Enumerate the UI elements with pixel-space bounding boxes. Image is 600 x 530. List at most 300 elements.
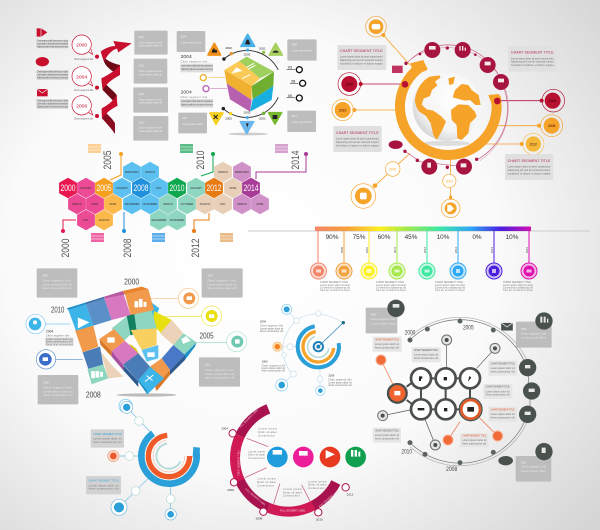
year labels [51, 276, 214, 399]
grey info boxes: Chart segment title [42, 280, 71, 283]
year bubbles [72, 35, 99, 120]
grey info boxes [133, 31, 317, 141]
arc year markers: 2012 [347, 492, 354, 496]
small text boxes [373, 337, 517, 447]
orbit around cube [222, 48, 278, 119]
grey info boxes: 2008 [43, 382, 49, 384]
small text boxes: Amet consectetur elit [491, 416, 515, 419]
hexagon labels [72, 170, 264, 222]
connectors [113, 407, 175, 514]
concentric arcs [138, 425, 200, 487]
dark icon circles [387, 300, 553, 465]
grey info boxes: Chart segment title [205, 369, 234, 372]
captions: 2006 [262, 360, 268, 364]
drop markers [310, 231, 537, 279]
small text boxes: CHART SEGMENT TITLE [491, 362, 515, 365]
percentages [326, 234, 519, 241]
left text blocks: Adipiscing elit sed do eiusmod tempor [181, 68, 213, 71]
rotated year labels: 2015 [525, 246, 529, 253]
caption: Sed do eiusmod [46, 344, 73, 346]
panel: small blue ring chart [260, 304, 352, 395]
year circles: 2010 [339, 108, 347, 112]
3D cube [224, 57, 274, 135]
year bubbles: 2004 [76, 74, 87, 80]
vertical year labels: 2012 [190, 238, 202, 258]
rotated year labels: 2013 [454, 246, 458, 253]
captions: 2008 [328, 374, 335, 378]
text captions [320, 281, 533, 292]
vertical year labels: 2005 [102, 150, 114, 170]
title boxes: Lorem ipsum dolor sit amet consectetur [511, 57, 554, 60]
title boxes: Incididunt ut labore et dolore magna [336, 144, 379, 147]
hexagon cells [59, 162, 269, 230]
rotated year labels [340, 246, 529, 253]
rotated year labels: 2009 [340, 246, 344, 253]
grey info boxes: Lorem ipsum dolor [292, 50, 313, 53]
hexagon labels: JANUARY [80, 186, 92, 190]
panel: rainbow percent timeline [248, 226, 590, 292]
title boxes: Lorem ipsum dolor sit amet consectetur [508, 166, 551, 169]
small text boxes: Lorem ipsum dolor sit [462, 439, 487, 442]
grey info boxes: Chart segment title [139, 70, 163, 73]
connector lines [43, 298, 228, 359]
caption: Lorem ipsum dolor sit [46, 338, 73, 341]
captions: Amet consectetur elit [260, 330, 284, 333]
year labels: 2000 [405, 331, 416, 337]
captions: Lorem ipsum [248, 450, 265, 453]
icons and text column: Adipiscing elit sed do eiusmod tempor [37, 76, 69, 79]
arc segment labels: FULL SEGMENT LABEL [318, 489, 340, 508]
small text boxes: Lorem ipsum dolor sit [414, 354, 438, 357]
grey info boxes: 2004 [371, 315, 377, 317]
side markers: 08 [291, 79, 295, 83]
concentric arcs [294, 323, 342, 371]
triangle year tags: 2001 [259, 47, 266, 51]
panel: hexagon timeline [59, 144, 308, 258]
connectors [381, 340, 498, 445]
left text blocks: 2004 [181, 54, 192, 60]
grey info boxes: 2006 [207, 275, 213, 277]
grey info boxes: 2006 [182, 118, 188, 120]
rotated year labels: 2010 [365, 246, 369, 253]
arc year markers: 2008 [256, 517, 263, 521]
rotated year labels: 2014 [490, 246, 494, 253]
blocks [67, 287, 197, 394]
grey info boxes: Lorem ipsum dolor sit [139, 130, 162, 133]
grey info boxes: 2008 [139, 94, 145, 96]
hexagon labels: APRIL [109, 202, 117, 206]
year bubbles: Chart segment title [74, 117, 94, 120]
crimson arc segments [216, 386, 360, 530]
year bubbles: Chart segment title [74, 89, 94, 92]
small text boxes: Amet consectetur elit [375, 346, 399, 349]
text captions: Sed do eiusmod tempor [320, 289, 350, 292]
markers [108, 401, 176, 520]
hexagon labels: MAY [220, 202, 226, 206]
ring nodes [388, 368, 482, 421]
captions: Consectetur [283, 495, 300, 498]
grey info boxes: Amet consectetur elit [207, 287, 237, 290]
maroon icon circles [389, 42, 509, 175]
captions: Dolor sit amet [257, 481, 276, 484]
year circles: 2008 [346, 82, 353, 86]
small text boxes: Amet consectetur elit [375, 437, 399, 440]
hexagon year labels [60, 183, 258, 193]
grey info boxes: Lorem ipsum dolor [521, 470, 546, 473]
captions [260, 320, 352, 387]
grey info boxes: Lorem ipsum dolor [182, 123, 203, 126]
left text blocks: Lorem ipsum dolor sit amet consectetur [181, 65, 213, 68]
grey info boxes [37, 268, 243, 404]
caption [45, 330, 73, 346]
title boxes: Adipiscing elit sed do eiusmod tempor [336, 141, 379, 144]
captions: Amet consectetur elit [262, 370, 285, 373]
small text boxes: Lorem ipsum dolor sit [491, 413, 515, 416]
hexagon labels: OCTOBER [181, 202, 194, 206]
grey info boxes: 2004 [42, 275, 48, 277]
grey info boxes: Lorem ipsum dolor sit [139, 102, 162, 105]
grey info boxes: Lorem ipsum dolor sit [43, 391, 73, 394]
year bubbles: Chart segment title [74, 58, 94, 61]
percentages: 10% [437, 234, 450, 241]
title boxes: CHART SEGMENT TITLE [340, 49, 384, 53]
grey info boxes: Lorem ipsum dolor sit [205, 373, 235, 376]
vertical year labels: 2008 [122, 238, 134, 258]
grey info boxes: Lorem ipsum dolor sit [207, 284, 237, 287]
small text boxes: CHART SEGMENT TITLE [414, 349, 438, 352]
text captions: CHART SEGMENT TITLE [320, 281, 348, 284]
caption: Amet consectetur elit [46, 341, 73, 344]
left text blocks: Lorem ipsum dolor sit amet consectetur [181, 100, 213, 103]
captions: Dolor sit amet [258, 431, 277, 434]
text captions: Consectetur adipiscing elit [503, 286, 533, 290]
hexagon labels: MARCH [218, 170, 228, 174]
title boxes: Amet consectetur elit [93, 441, 122, 444]
title boxes: CHART SEGMENT TITLE [336, 131, 380, 135]
captions: Dolor sit amet [283, 491, 302, 494]
left text blocks: Chart segment title [181, 61, 208, 64]
panel: 3D block loop [26, 268, 247, 413]
satellite markers [376, 335, 503, 450]
year bubbles: 2000 [76, 43, 87, 49]
arc segment labels: FULL SEGMENT LABEL [236, 451, 239, 477]
year circles: 2008 [548, 124, 555, 128]
icons and text column: Lorem ipsum dolor sit amet consectetur [37, 43, 69, 46]
small text boxes: Lorem ipsum dolor sit [491, 367, 515, 370]
markers [273, 304, 345, 395]
grey info boxes: Lorem ipsum dolor sit [139, 45, 162, 48]
grey info boxes: Chart segment title [521, 332, 547, 335]
hexagon year labels: 2010 [170, 183, 184, 193]
small mini tables [88, 144, 288, 242]
hexagon year labels: 2008 [134, 183, 148, 193]
icons and text column: Lorem ipsum dolor sit amet consectetur [37, 102, 69, 105]
text captions: Consectetur adipiscing elit [320, 286, 350, 290]
connector lines [353, 35, 542, 200]
grey info boxes: 2012 [521, 462, 527, 464]
small text boxes: Lorem ipsum dolor sit [375, 343, 399, 346]
captions: Lorem ipsum dolor sit [260, 327, 284, 330]
vertical year labels: 2010 [195, 150, 207, 170]
captions: Lorem ipsum dolor sit [328, 381, 352, 384]
grey info boxes: Chart segment title [139, 98, 163, 101]
text captions: Lorem ipsum dolor sit amet [320, 284, 350, 287]
title boxes: Adipiscing elit sed do eiusmod tempor [340, 59, 383, 62]
text captions: Sed do eiusmod tempor [376, 289, 406, 292]
hexagon year labels: 2005 [96, 183, 112, 193]
grey info boxes: 2004 [139, 37, 145, 39]
caption: 2004 [46, 330, 54, 334]
hexagon labels: DECEMBER [125, 202, 139, 206]
grey info boxes: Amet consectetur elit [42, 287, 72, 290]
captions: Chart segment title [262, 364, 286, 367]
text captions: CHART SEGMENT TITLE [503, 281, 531, 284]
text captions: Sed do eiusmod tempor [435, 289, 465, 292]
captions: Lorem ipsum [257, 478, 276, 481]
hexagon labels: DECEMBER [152, 218, 166, 222]
captions: 2004 [260, 320, 266, 324]
red ribbon arrow [101, 41, 132, 134]
hexagon year labels: 2014 [244, 183, 258, 193]
left text blocks [181, 54, 213, 108]
arc segment labels: FULL SEGMENT LABEL [245, 488, 267, 507]
grey info boxes: Chart segment title [521, 466, 547, 469]
captions: Chart segment title [260, 325, 284, 328]
title boxes [86, 429, 124, 494]
icons and text column: Chart segment title lorem ipsum dolor [37, 99, 69, 102]
captions: Amet consectetur elit [328, 384, 352, 387]
title boxes: Incididunt ut labore et dolore magna [508, 172, 551, 175]
arc year markers: 2010 [316, 517, 323, 521]
grey info boxes: Lorem ipsum dolor sit [42, 284, 72, 287]
triangle year tags: 2001 [259, 116, 266, 120]
title boxes: CHART SEGMENT TITLE [508, 159, 551, 163]
triangle year tags: 2003 [244, 52, 251, 56]
hexagon labels: AUGUST [99, 218, 110, 222]
panel: blue and red ring chart [86, 401, 200, 520]
title boxes: Incididunt ut labore et dolore magna [340, 62, 383, 65]
year labels: 2000 [124, 276, 139, 286]
arc segment labels: FULL SEGMENT LABEL [239, 408, 260, 429]
icons and text column: Chart segment title lorem ipsum dolor [37, 70, 69, 73]
percentages: 75% [353, 234, 366, 241]
title boxes: Amet consectetur elit [89, 488, 119, 491]
icons and text column: Lorem ipsum dolor sit amet consectetur [37, 73, 69, 76]
small text boxes: Lorem ipsum dolor sit [375, 434, 399, 437]
left text blocks: 2004 [181, 89, 192, 95]
small text boxes: CHART SEGMENT TITLE [462, 435, 487, 438]
hexagon labels: NOVEMBER [170, 218, 185, 222]
vertical year labels: 2000 [60, 238, 72, 258]
panel: globe chart [332, 16, 565, 218]
text captions: Consectetur adipiscing elit [376, 286, 406, 290]
year labels: 2008 [446, 467, 458, 473]
year circles: 2012 [446, 179, 453, 183]
title boxes: Adipiscing elit sed do eiusmod tempor [511, 61, 554, 64]
small text boxes: Lorem ipsum dolor sit [486, 390, 510, 393]
hexagon labels: MARCH [72, 202, 82, 206]
captions: Dolor sit amet [308, 484, 327, 487]
orbit dots [407, 318, 496, 465]
title boxes: CHART SEGMENT TITLE [93, 433, 122, 436]
side markers [200, 65, 306, 101]
captions: Chart segment title [328, 379, 352, 382]
hexagon labels: FEBRUARY [235, 170, 249, 174]
icons and text column [36, 28, 69, 109]
year labels [401, 326, 474, 473]
grey info boxes: Lorem ipsum dolor [521, 337, 546, 340]
small text boxes: Amet consectetur elit [462, 442, 487, 445]
hexagon labels: NOVEMBER [143, 202, 158, 206]
captions: Consectetur [308, 487, 325, 490]
title boxes: Lorem ipsum dolor sit [93, 438, 122, 441]
arc segment labels [236, 408, 340, 513]
small text boxes: Amet consectetur elit [491, 370, 515, 373]
triangle year tags [208, 34, 282, 134]
title boxes: CHART SEGMENT TITLE [511, 51, 555, 55]
percentages: 10% [506, 234, 519, 241]
grey info boxes: Lorem ipsum dolor [371, 322, 396, 325]
title boxes: CHART SEGMENT TITLE [89, 480, 119, 483]
captions: Lorem ipsum [283, 488, 302, 491]
grey info boxes: Chart segment title [43, 387, 72, 390]
year circles: 2012 [530, 142, 537, 146]
vertical year labels [60, 150, 302, 258]
year labels: 2010 [401, 450, 413, 456]
captions: Consectetur [257, 484, 274, 487]
connector lines [61, 152, 308, 233]
grey info boxes: 2004 [181, 36, 187, 38]
grey info boxes: Lorem ipsum dolor [292, 121, 313, 124]
grey info boxes [366, 308, 552, 482]
rainbow bar [315, 226, 531, 231]
grey info boxes: Chart segment title [139, 41, 163, 44]
grey info boxes: Amet consectetur elit [205, 376, 235, 379]
triangle year tags: 2002 [225, 46, 232, 50]
thin orbit [277, 309, 343, 391]
arc year markers: 2006 [227, 488, 234, 492]
year circles: 2010 [389, 167, 397, 171]
hexagon labels: FEBRUARY [125, 170, 139, 174]
hexagon year labels: 2000 [60, 183, 76, 193]
grey info boxes: 2012 [139, 122, 145, 124]
year labels: 2008 [86, 389, 101, 399]
year labels: 2005 [463, 326, 474, 332]
text captions: CHART SEGMENT TITLE [376, 281, 404, 284]
title boxes [333, 45, 557, 180]
panel: network of circles [366, 300, 553, 482]
small text boxes: Amet consectetur elit [414, 357, 438, 360]
grey info boxes: 2012 [205, 365, 211, 367]
arc segment labels: FULL SEGMENT LABEL [280, 510, 306, 513]
percentages: 45% [405, 234, 418, 241]
text captions: Sed do eiusmod tempor [503, 289, 533, 292]
rotated year labels: 2011 [393, 247, 397, 253]
small text boxes: CHART SEGMENT TITLE [375, 338, 399, 341]
text captions: CHART SEGMENT TITLE [435, 281, 463, 284]
title boxes: Incididunt ut labore et dolore magna [511, 64, 554, 67]
captions [248, 428, 327, 498]
outer double orbit [410, 317, 531, 466]
hexagon labels: MAY [83, 218, 89, 222]
title boxes: Adipiscing elit sed do eiusmod tempor [508, 169, 551, 172]
triangle year tags: 2003 [244, 110, 251, 114]
captions: Lorem ipsum [308, 480, 327, 483]
icons and text column: Chart segment title lorem ipsum dolor [37, 40, 69, 43]
captions: Consectetur [258, 434, 275, 437]
globe [413, 73, 481, 146]
side markers: 03 [288, 65, 292, 69]
shadow [117, 393, 177, 397]
grey info boxes: 2012 [292, 116, 298, 118]
grey info boxes: Lorem ipsum dolor sit [139, 73, 162, 76]
triangle year tags: 2002 [225, 117, 232, 121]
circular icons [26, 288, 247, 413]
year bubbles: 2008 [76, 103, 87, 109]
hexagon labels: JANUARY [116, 186, 128, 190]
icons and text column: Adipiscing elit sed do eiusmod tempor [37, 105, 69, 108]
grey info boxes: 2006 [139, 66, 145, 68]
baseline [248, 230, 590, 232]
grey info boxes: Chart segment title [139, 127, 163, 130]
hexagon labels: MARCH [163, 202, 173, 206]
hexagon labels: APRIL [91, 202, 99, 206]
left text blocks: Adipiscing elit sed do eiusmod tempor [181, 103, 213, 106]
title boxes: Lorem ipsum dolor sit amet consectetur [336, 138, 379, 141]
side markers: 09 [288, 94, 292, 98]
year circles: 2004 [549, 99, 556, 103]
percentages: 90% [326, 234, 339, 241]
hexagon year labels: 2012 [206, 183, 222, 193]
text captions: Consectetur adipiscing elit [435, 286, 465, 290]
colored icon circles [267, 447, 366, 467]
icons and text column: Adipiscing elit sed do eiusmod tempor [37, 46, 69, 49]
grey info boxes: Chart segment title [371, 318, 396, 321]
hexagon labels: MAY [156, 186, 162, 190]
captions: Consectetur [248, 457, 265, 460]
percentages: 60% [378, 234, 391, 241]
small text boxes: CHART SEGMENT TITLE [491, 408, 515, 411]
hexagon labels: AUGUST [200, 202, 211, 206]
title boxes: Lorem ipsum dolor sit [89, 484, 119, 487]
small text boxes: Amet consectetur elit [486, 394, 510, 397]
percentages: 0% [472, 234, 482, 241]
small text boxes: CHART SEGMENT TITLE [486, 386, 510, 389]
text captions: Lorem ipsum dolor sit amet [376, 284, 406, 287]
panel: crimson arc timeline [216, 386, 366, 530]
captions: Lorem ipsum [258, 428, 277, 431]
panel: ribbon timeline [36, 28, 317, 141]
orange ring [391, 49, 506, 164]
year labels: 2010 [51, 305, 64, 315]
small text boxes: CHART SEGMENT TITLE [375, 429, 399, 432]
text captions: Lorem ipsum dolor sit amet [503, 284, 533, 287]
caption: Chart segment title [46, 335, 70, 338]
year circles [332, 16, 565, 218]
grey info boxes: 2008 [292, 45, 298, 47]
captions: Lorem ipsum dolor sit [262, 367, 285, 370]
captions: Dolor sit amet [248, 454, 265, 457]
hexagon labels: JANUARY [190, 186, 202, 190]
grey info boxes: Amet consectetur elit [43, 394, 73, 397]
grey info boxes: 2006 [521, 329, 527, 331]
vertical year labels: 2014 [290, 150, 302, 170]
left text blocks: Chart segment title [181, 96, 208, 99]
title boxes: Lorem ipsum dolor sit amet consectetur [340, 56, 383, 59]
text captions: Lorem ipsum dolor sit amet [435, 284, 465, 287]
grey info boxes: Lorem ipsum dolor [181, 41, 202, 44]
year labels: 2005 [200, 330, 214, 340]
